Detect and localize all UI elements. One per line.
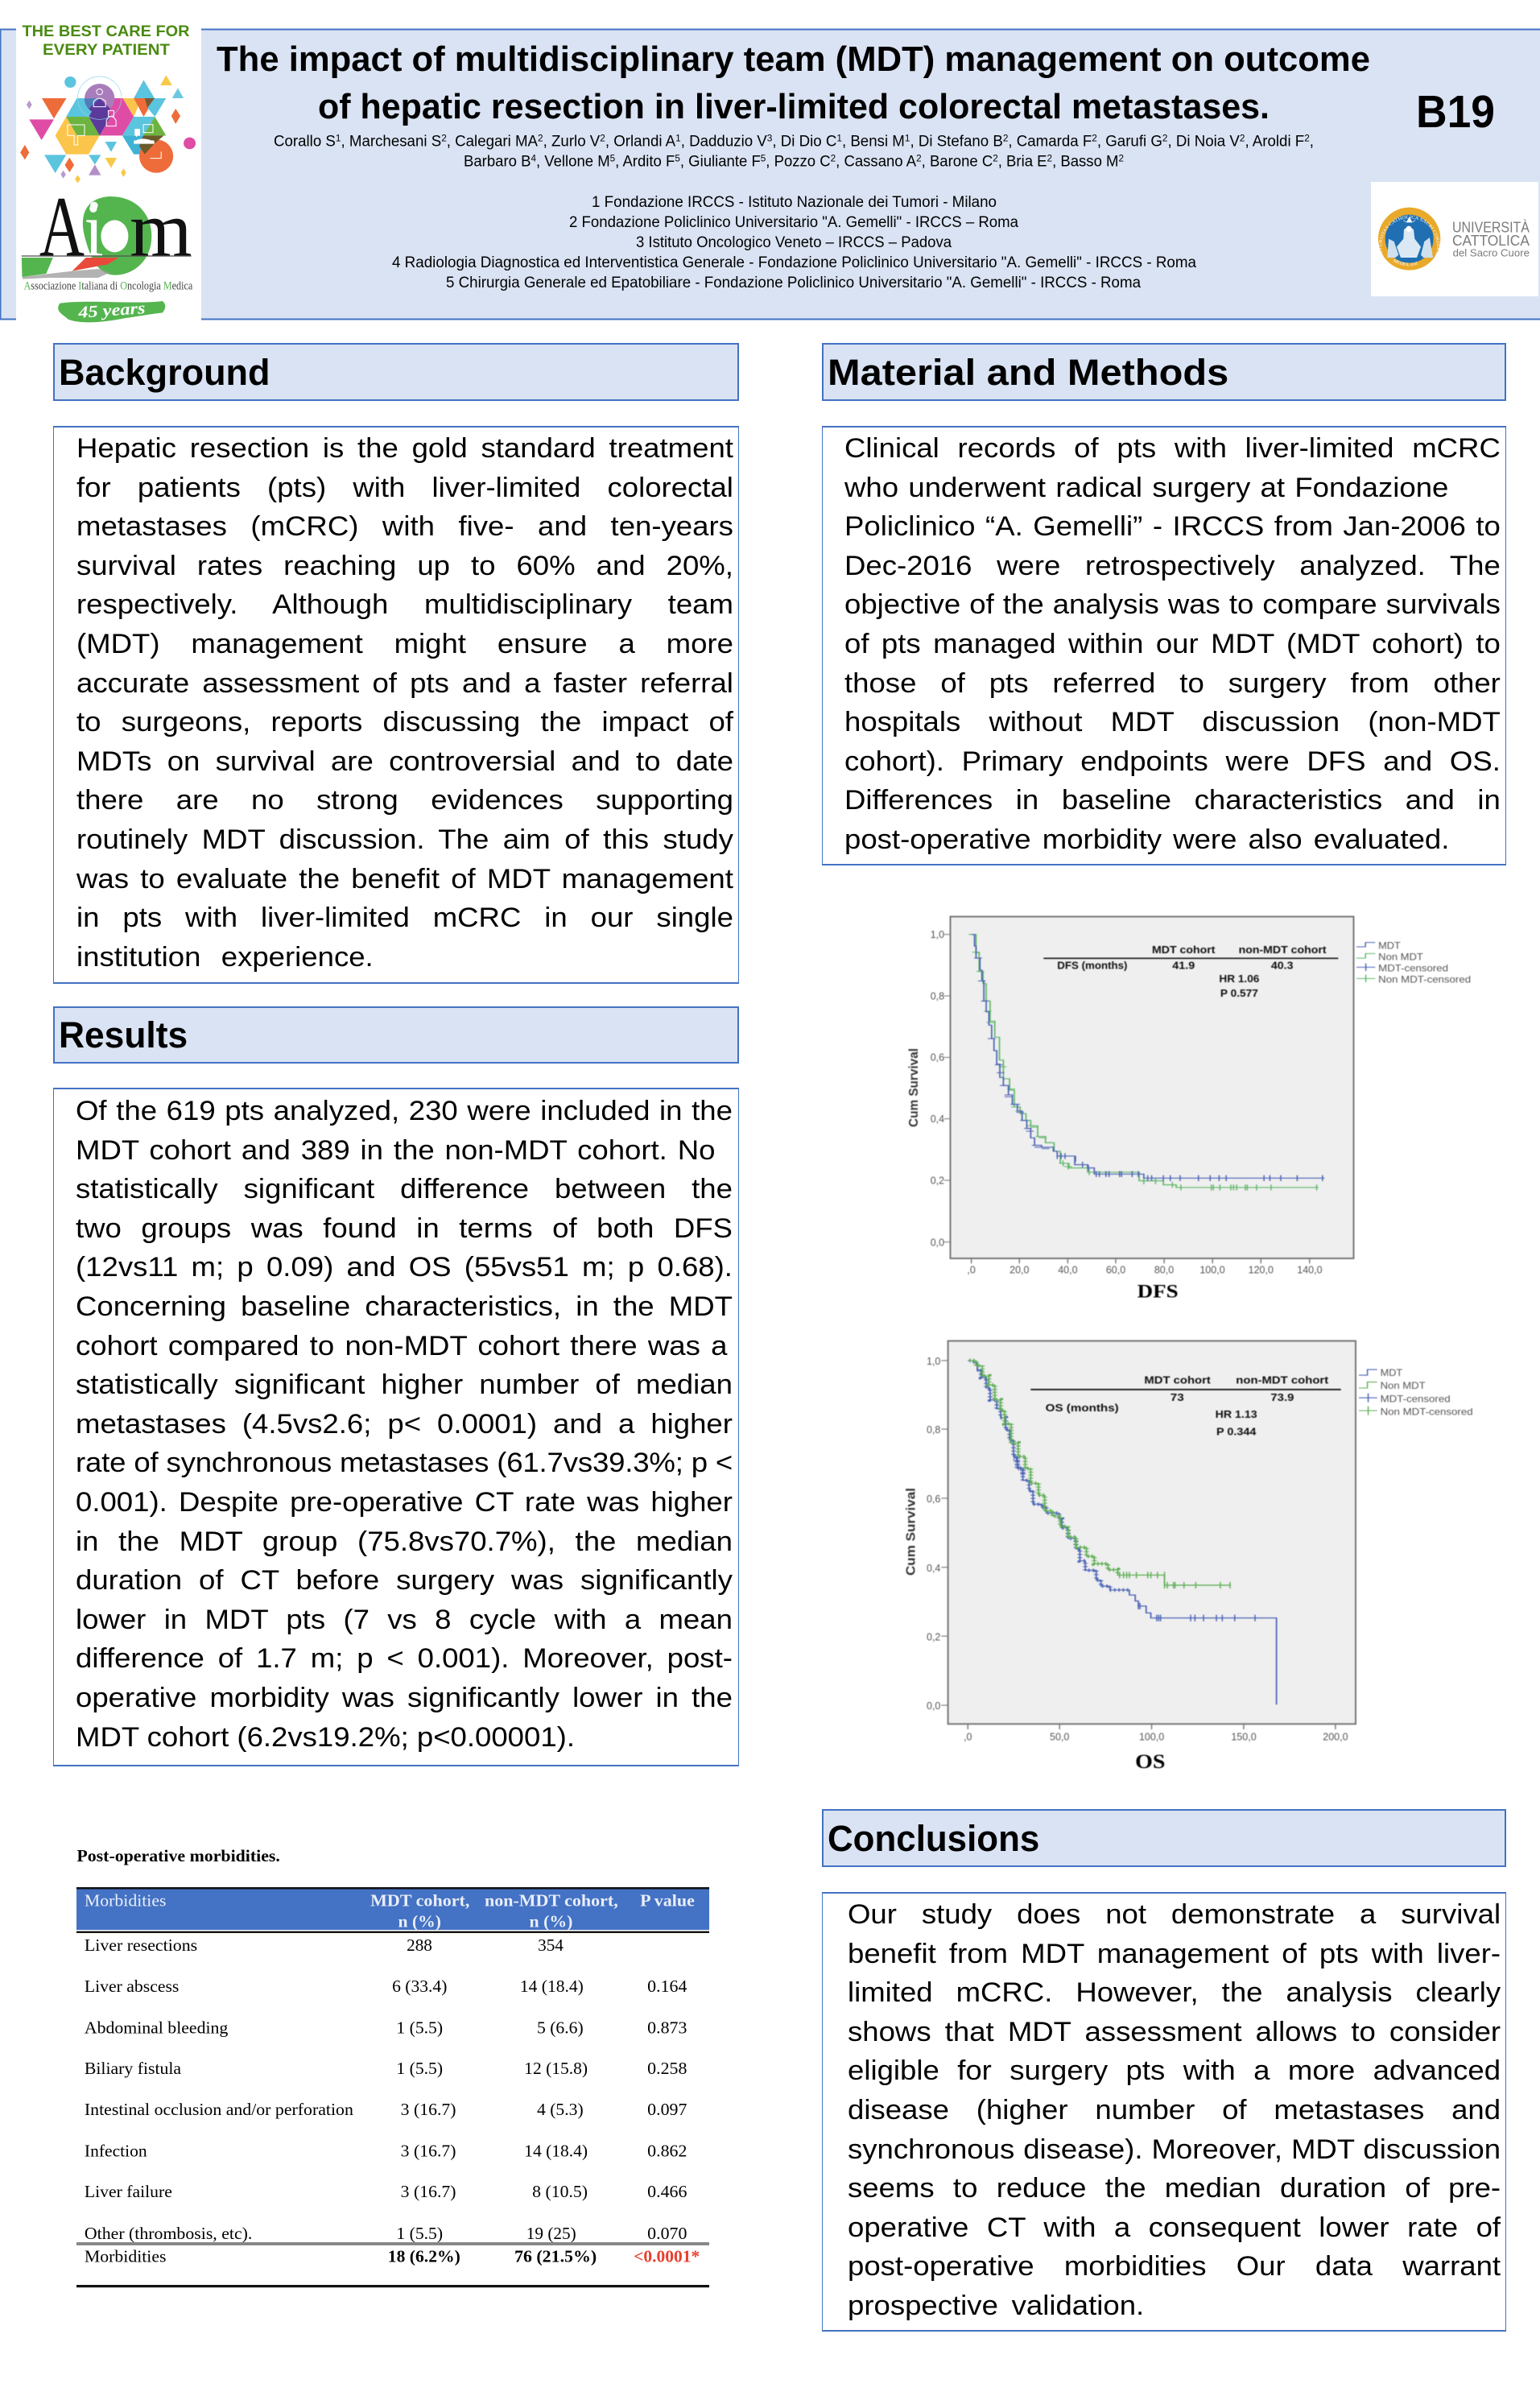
axis tick labels: 0,0 [927,1700,940,1712]
poster code B19: B19 [1416,86,1495,138]
text block: Conclusions: disease (higher number of metastases and [848,2095,1501,2125]
text block: Conclusions: operative CT with a consequent lower rate of [848,2212,1501,2243]
logo: AIOM: m [130,186,192,273]
text block: Methods: post-operative morbidity were also evaluated. [844,824,1449,855]
logo: AIOM [22,180,193,322]
text block: Methods: Clinical records of pts with liver-limited mCRC [844,433,1501,464]
logo: Università Cattolica: del Sacro Cuore [1453,247,1530,258]
legend: MDT [1378,940,1402,951]
text block: Conclusions: eligible for surgery pts with a more advanced [848,2055,1501,2086]
text block: Results: in the MDT group (75.8vs70.7%), the median [76,1526,733,1557]
logo: Università Cattolica: CATTOLICA [1452,232,1530,249]
table rows: 0.873 [647,2018,687,2037]
axis tick labels: 1,0 [931,929,944,940]
in-plot summary table: 41.9 [1172,959,1195,971]
legend: MDT [1381,1367,1403,1378]
axis tick labels: 0,8 [927,1424,940,1436]
text block: Results: Concerning baseline characteristics, in the MDT [76,1291,733,1322]
text block: Background: Hepatic resection is the gold standard treatment [76,433,733,464]
text block: Methods: cohort). Primary endpoints were DFS and OS. [844,746,1501,777]
text block: Background: MDTs on survival are controversial and to date [76,746,733,777]
text block: Background: for patients (pts) with liver-limited colorectal [76,473,733,503]
logo: AIOM: A [39,180,85,275]
table rows: Infection [85,2142,147,2161]
heading: Conclusions [821,1809,1505,1867]
table rows: 0.097 [647,2100,687,2119]
table rows [85,1935,687,2243]
in-plot summary table [1043,944,1338,999]
axis tick labels: 80,0 [1154,1265,1174,1276]
logo tagline: EVERY PATIENT [43,42,170,59]
axis tick labels: 0,2 [931,1175,944,1187]
y axis title: Cum Survival [907,1048,921,1127]
heading: Material and Methods [821,343,1505,401]
table total row: <0.0001* [634,2247,700,2266]
affiliations [392,194,1196,291]
text block: Methods: objective of the analysis was to compare survivals [844,589,1501,620]
text block: Results: MDT cohort (6.2vs19.2%; p<0.00001). [76,1721,575,1752]
axis tick labels: 40,0 [1058,1265,1078,1276]
table rows: 19 (25) [526,2224,576,2243]
axis tick labels: 0,4 [931,1113,944,1125]
table rows: 4 (5.3) [537,2100,584,2119]
legend: MDT-censored [1381,1393,1451,1404]
heading: Background [53,343,739,401]
in-plot summary table: HR 1.06 [1219,973,1259,985]
text block: Methods: those of pts referred to surgery from other [844,668,1501,699]
table rows: 3 (16.7) [401,2142,456,2161]
axis tick labels: 150,0 [1231,1732,1257,1743]
text block: Results: (12vs11 m; p 0.09) and OS (55vs51 m; p 0.68). [76,1252,733,1283]
panel: Background text [53,426,739,984]
text block: Methods [844,433,1501,855]
authors: Corallo S1, Marchesani S2, Calegari MA2, Zurlo V2, Orlandi A1, Dadduzio V3, Di Dio C1, Bensi M1, Di Stefano B2, Camarda F2, Garufi G2, Di Noia V2, Aroldi F2, [274,132,1314,150]
in-plot summary table: MDT cohort [1144,1374,1212,1386]
text block: Results: cohort compared to non-MDT cohort there was a [76,1331,728,1361]
in-plot summary table: non-MDT cohort [1239,944,1327,956]
table: post-operative morbidities [76,1846,709,2288]
axis tick labels: 100,0 [1139,1732,1164,1743]
text block: Background: (MDT) management might ensure a more [76,629,733,659]
table rows: 0.070 [647,2224,687,2243]
in-plot summary table: 73 [1170,1391,1184,1403]
text block: Results: Of the 619 pts analyzed, 230 were included in the [76,1096,733,1126]
table header [76,1887,709,1933]
heading: Results [53,1006,739,1064]
x axis title: OS [1135,1751,1166,1773]
text block: Conclusions: Our study does not demonstrate a survival [848,1899,1501,1930]
text block: Methods: Policlinico “A. Gemelli” - IRCCS from Jan-2006 to [844,511,1501,542]
text block: Background: metastases (mCRC) with five- and ten-years [76,511,733,542]
table rows: 8 (10.5) [532,2182,588,2201]
table title: Post-operative morbidities. [76,1846,280,1865]
text block: Conclusions: seems to reduce the median duration of pre- [848,2173,1501,2204]
axis tick labels: 0,2 [927,1631,940,1642]
text block: Background: routinely MDT discussion. The aim of this study [76,824,733,855]
axis tick labels: 0,4 [927,1563,940,1574]
table rows: Abdominal bleeding [85,2018,229,2037]
axis tick labels [931,929,1323,1276]
table rows: 3 (16.7) [401,2182,456,2201]
heading: Background: Background [59,352,270,393]
axis tick labels: ,0 [967,1265,976,1276]
chart: OS Kaplan-Meier curve [904,1340,1473,1773]
text block: Methods: of pts managed within our MDT (MDT cohort) to [844,629,1501,659]
table rows: 0.164 [647,1977,687,1996]
table header: P value [640,1891,695,1911]
table rows: 288 [407,1935,432,1955]
table total row [76,2242,709,2287]
text block: Results: statistically significant higher number of median [76,1369,733,1400]
table header: n (%) [530,1912,572,1931]
table rows: 0.258 [647,2059,687,2078]
text block: Background: accurate assessment of pts and a faster referral [76,668,733,699]
text block: Results: operative morbidity was significantly lower in the [76,1683,733,1713]
in-plot summary table: MDT cohort [1152,944,1216,956]
header banner [0,23,1540,322]
in-plot summary table: DFS (months) [1057,959,1127,971]
table rows: 1 (5.5) [396,2018,443,2037]
text block: Results: metastases (4.5vs2.6; p< 0.0001) and a higher [76,1409,733,1440]
heading: Results: Results [59,1014,188,1055]
authors [274,132,1314,171]
text block: Results: 0.001). Despite pre-operative CT rate was higher [76,1487,733,1518]
table header: non-MDT cohort, [485,1891,618,1911]
table rows: 6 (33.4) [392,1977,447,1996]
text block: Conclusions: limited mCRC. However, the analysis clearly [848,1977,1501,2008]
title [217,39,1370,126]
text block: Conclusions: prospective validation. [848,2291,1145,2321]
axis tick labels: 0,0 [931,1237,944,1249]
logo: AIOM: Associazione Italiana di Oncologia Medica [24,279,193,292]
legend: Non MDT [1378,951,1424,962]
logo: Università Cattolica: UNIVERSITÀ [1452,218,1530,235]
logo panel: best care and AIOM [16,23,201,325]
text block: Background: there are no strong evidences supporting [76,785,733,816]
logo tagline [23,23,190,59]
text block: Methods: who underwent radical surgery at Fondazione [844,473,1448,503]
axis tick labels: 0,8 [931,991,944,1002]
plot area [941,1341,1356,1729]
panel: Results text [53,1088,739,1766]
legend: Non MDT [1381,1380,1426,1391]
table total row: 18 (6.2%) [388,2247,460,2266]
text block: Background: respectively. Although multidisciplinary team [76,589,733,620]
in-plot summary table: 40.3 [1271,959,1293,971]
in-plot summary table: 73.9 [1270,1391,1294,1403]
text block: Methods: Differences in baseline characteristics and in [844,785,1501,816]
in-plot summary table: OS (months) [1046,1402,1119,1414]
table rows: 354 [538,1935,564,1955]
survival curves [968,935,1324,1191]
table rows: Intestinal occlusion and/or perforation [85,2100,353,2119]
table rows: 12 (15.8) [524,2059,588,2078]
table rows: 3 (16.7) [401,2100,456,2119]
table rows: Liver abscess [85,1977,179,1996]
axis tick labels: 1,0 [927,1356,940,1367]
affiliations: 5 Chirurgia Generale ed Epatobiliare - Fondazione Policlinico Universitario "A. Gemelli" - IRCCS - Roma [446,275,1141,291]
text block: Conclusions: synchronous disease). Moreover, MDT discussion [848,2134,1501,2165]
text block: Results: MDT cohort and 389 in the non-MDT cohort. No [76,1135,716,1166]
table rows: Liver failure [85,2182,172,2201]
affiliations: 3 Istituto Oncologico Veneto – IRCCS – Padova [636,234,952,251]
table rows: 14 (18.4) [520,1977,584,1996]
text block: Methods: hospitals without MDT discussion (non-MDT [844,707,1501,737]
table header: n (%) [398,1912,441,1931]
legend: Non MDT-censored [1381,1406,1473,1417]
affiliations: 2 Fondazione Policlinico Universitario "A. Gemelli" - IRCCS – Roma [569,214,1018,231]
table rows: Biliary fistula [85,2059,182,2078]
text block: Background: to surgeons, reports discussing the impact of [76,707,733,737]
text block: Results: lower in MDT pts (7 vs 8 cycle with a mean [76,1605,733,1635]
icon: hexagon care graphic [20,75,196,184]
authors: Barbaro B4, Vellone M5, Ardito F5, Giuliante F5, Pozzo C2, Cassano A2, Barone C2, Bria E2, Basso M2 [464,153,1124,171]
text block: Conclusions: shows that MDT assessment allows to consider [848,2017,1501,2047]
x axis title: DFS [1137,1282,1179,1302]
text block: Results: statistically significant difference between the [76,1174,733,1204]
text block: Conclusions [848,1899,1501,2321]
affiliations: 4 Radiologia Diagnostica ed Interventistica Generale - Fondazione Policlinico Universitario "A. Gemelli" - IRCCS - Roma [392,254,1196,271]
table rows: 5 (6.6) [537,2018,584,2037]
panel: Conclusions text [821,1892,1505,2332]
text block: Results: two groups was found in terms of both DFS [76,1213,733,1244]
legend [1359,1367,1473,1417]
logo: AIOM: i [84,187,104,273]
chart: DFS Kaplan-Meier curve [907,915,1471,1302]
text block: Conclusions: benefit from MDT management of pts with liver- [848,1939,1501,1969]
axis tick labels: 20,0 [1009,1265,1030,1276]
in-plot summary table: P 0.577 [1220,987,1258,999]
axis tick labels [927,1356,1348,1743]
axis tick labels: 140,0 [1297,1265,1323,1276]
table rows: 1 (5.5) [396,2224,443,2243]
text block: Background: institution experience. [76,942,374,973]
legend: MDT-censored [1378,963,1448,974]
table header: MDT cohort, [370,1891,469,1911]
logo: AIOM: 45 years [76,298,146,322]
title: The impact of multidisciplinary team (MDT) management on outcome [217,39,1370,79]
plot area [944,916,1354,1263]
axis tick labels: 100,0 [1199,1265,1225,1276]
table header: Morbidities [85,1891,166,1911]
text block: Methods: Dec-2016 were retrospectively analyzed. The [844,551,1501,581]
in-plot summary table: P 0.344 [1216,1425,1257,1438]
axis tick labels: 200,0 [1323,1732,1348,1743]
text block: Results: difference of 1.7 m; p < 0.001). Moreover, post- [76,1643,733,1674]
text block: Results: rate of synchronous metastases (61.7vs39.3%; p < [76,1448,733,1478]
axis tick labels: ,0 [964,1732,972,1743]
title: of hepatic resection in liver-limited colorectal metastases. [318,87,1270,126]
axis tick labels: 0,6 [927,1493,940,1505]
text block: Background: in pts with liver-limited mCRC in our single [76,903,733,933]
logo: Università Cattolica: MEDIOLANI [1393,258,1418,266]
affiliations: 1 Fondazione IRCCS - Istituto Nazionale dei Tumori - Milano [592,194,997,211]
in-plot summary table: HR 1.13 [1216,1408,1257,1420]
axis tick labels: 50,0 [1050,1732,1069,1743]
logo tagline: THE BEST CARE FOR [23,23,190,40]
table rows: 1 (5.5) [396,2059,443,2078]
heading: Conclusions: Conclusions [828,1818,1039,1859]
table total row: Morbidities [85,2247,166,2266]
text block: Background: survival rates reaching up to 60% and 20%, [76,551,733,581]
in-plot summary table [1030,1374,1341,1438]
text block: Results [76,1096,733,1752]
table rows: 0.862 [647,2142,687,2161]
table rows: 0.466 [647,2182,687,2201]
table rows: 14 (18.4) [524,2142,588,2161]
in-plot summary table: non-MDT cohort [1236,1374,1329,1386]
text block: Background [76,433,733,973]
y axis title: Cum Survival [904,1488,918,1576]
axis tick labels: 0,6 [931,1052,944,1064]
text block: Conclusions: post-operative morbidities Our data warrant [848,2251,1501,2282]
panel: Methods text [821,426,1505,865]
survival curves [968,1361,1277,1704]
table rows: Other (thrombosis, etc). [85,2224,252,2243]
axis tick labels: 60,0 [1106,1265,1125,1276]
logo: Università Cattolica: VNIVERSITAS CATHOLICA SACRI CORDIS IESV [1378,216,1440,258]
table rows: Liver resections [85,1935,197,1955]
legend [1356,940,1471,985]
legend: Non MDT-censored [1378,974,1471,985]
table total row: 76 (21.5%) [514,2247,597,2266]
text block: Background: was to evaluate the benefit of MDT management [76,864,733,894]
axis tick labels: 120,0 [1249,1265,1274,1276]
logo: Università Cattolica [1371,182,1538,296]
heading: Material and Methods: Material and Methods [828,352,1228,393]
text block: Results: duration of CT before surgery was significantly [76,1565,733,1596]
